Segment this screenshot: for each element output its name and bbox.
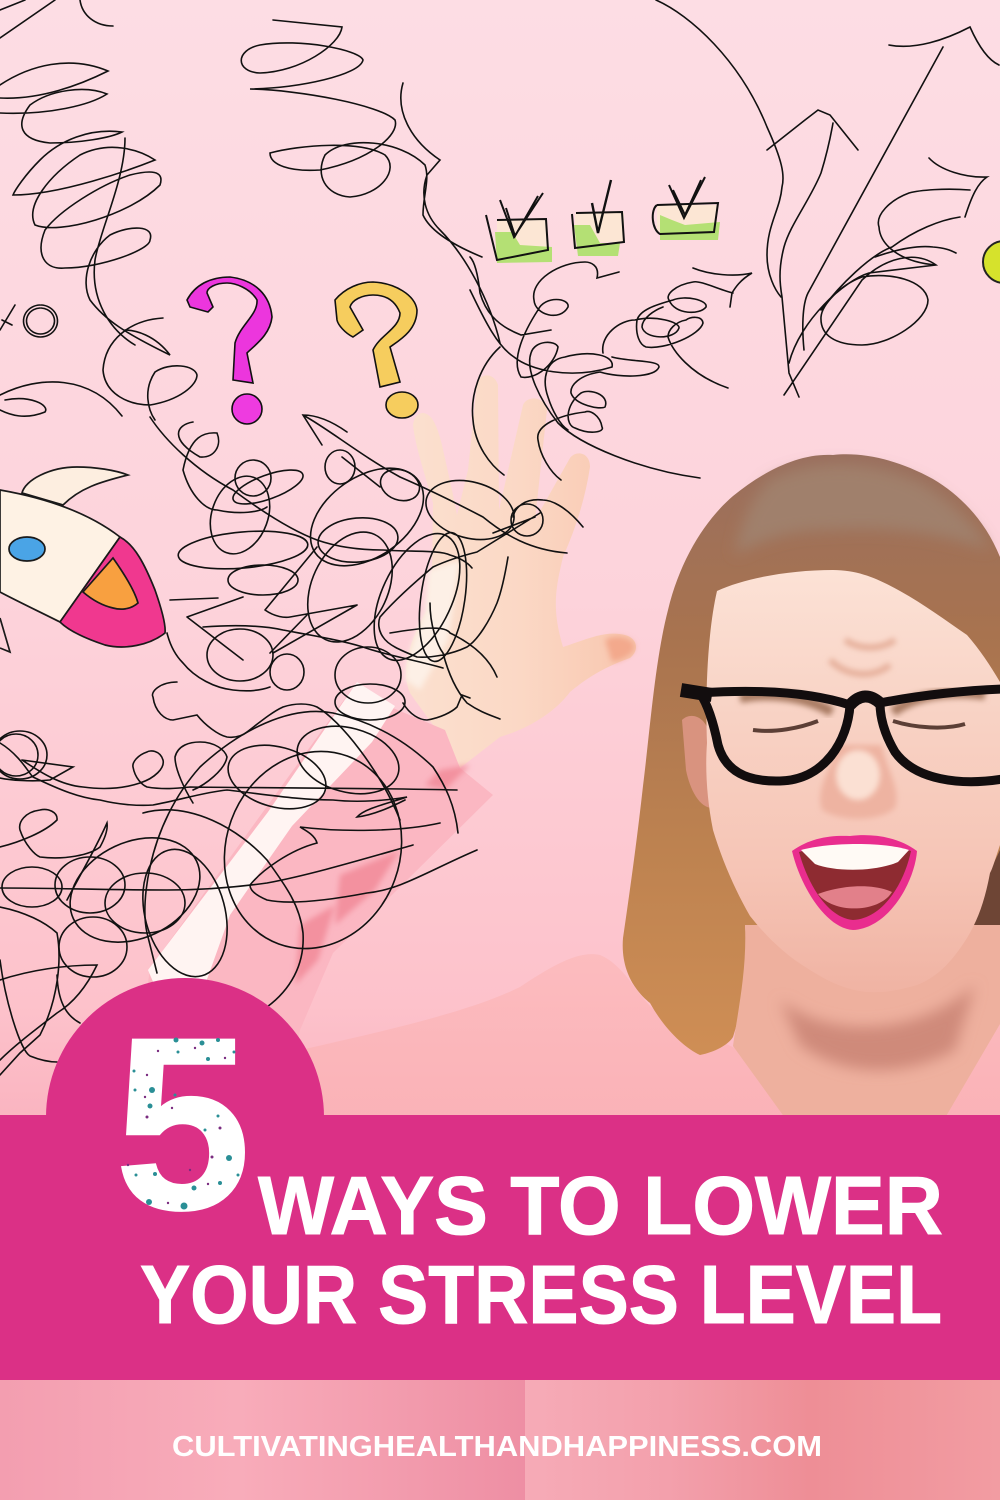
hand: thumb tip [605,637,634,662]
title line 2: YOUR STRESS LEVEL [140,1248,942,1341]
scribble: center ovals [177,448,543,720]
scribble: left loops [0,305,122,416]
neck and chest [733,925,1000,1118]
scribble: under checkboxes [470,257,752,480]
scribble: arrows at right [767,27,999,397]
speckles on the number [132,1038,240,1210]
scribble: center tangle [150,417,472,568]
question mark dot [232,394,262,424]
scribble: top arc [656,0,783,297]
rocket nose [60,537,165,647]
icon: small spiral [23,305,58,337]
scribble: lower middle [0,742,457,817]
mouth [792,835,917,930]
rocket eye [9,537,45,561]
scribble: bottom left ovals [2,818,240,986]
icon: green circle at edge [983,241,1000,283]
ear [682,716,715,808]
icon: yellow question mark [335,282,418,418]
hair [623,454,1000,1055]
hand: palm and fingers [406,375,636,768]
sleeve: raised arm [130,682,493,1120]
scribbles: tangled black lines [0,0,999,1075]
question mark dot [386,392,418,418]
checkbox 3 [653,177,720,240]
rocket fin [22,467,128,505]
scribble: lower ovals [0,716,429,974]
hair: parting shade [735,465,990,555]
rocket lower fin [0,618,10,652]
hand [405,375,636,768]
bottom strip background [0,1370,530,1500]
icon: green checkboxes [486,177,720,263]
banner tab circle [46,978,324,1256]
hair: dark side [955,850,1000,990]
sleeve body [130,682,493,1120]
scribble: bottom left lines [0,712,477,1075]
icon: pink question mark [187,277,272,424]
neck shadow [780,985,975,1070]
scribble: top left [0,0,197,420]
sleeve shadows [295,765,470,985]
big number 5: 5 [114,986,251,1262]
banner band [0,1115,1000,1380]
rocket body [0,490,120,622]
sweater below banner [525,1370,1000,1500]
forehead furrow [830,640,895,674]
woman [300,454,1000,1500]
sweater [300,954,1000,1370]
rocket nose window [83,558,138,609]
checkbox 2 [572,180,624,256]
scribble: top center [241,20,500,343]
title line 1: WAYS TO LOWER [258,1159,943,1252]
closed eyes [753,721,965,731]
sleeve highlight stripe [148,682,395,1010]
hand: lit edge [405,560,460,690]
checkbox 1 [486,193,552,263]
banner: pink title band [0,978,1000,1380]
nose [820,745,897,819]
scribble: center lines [152,415,583,820]
face [706,570,1000,992]
website url: CULTIVATINGHEALTHANDHAPPINESS.COM [172,1431,822,1463]
icon: rocket [0,467,165,652]
glasses [681,689,1000,782]
brows behind lenses [740,693,985,712]
purple speckles on the number [127,1047,226,1204]
